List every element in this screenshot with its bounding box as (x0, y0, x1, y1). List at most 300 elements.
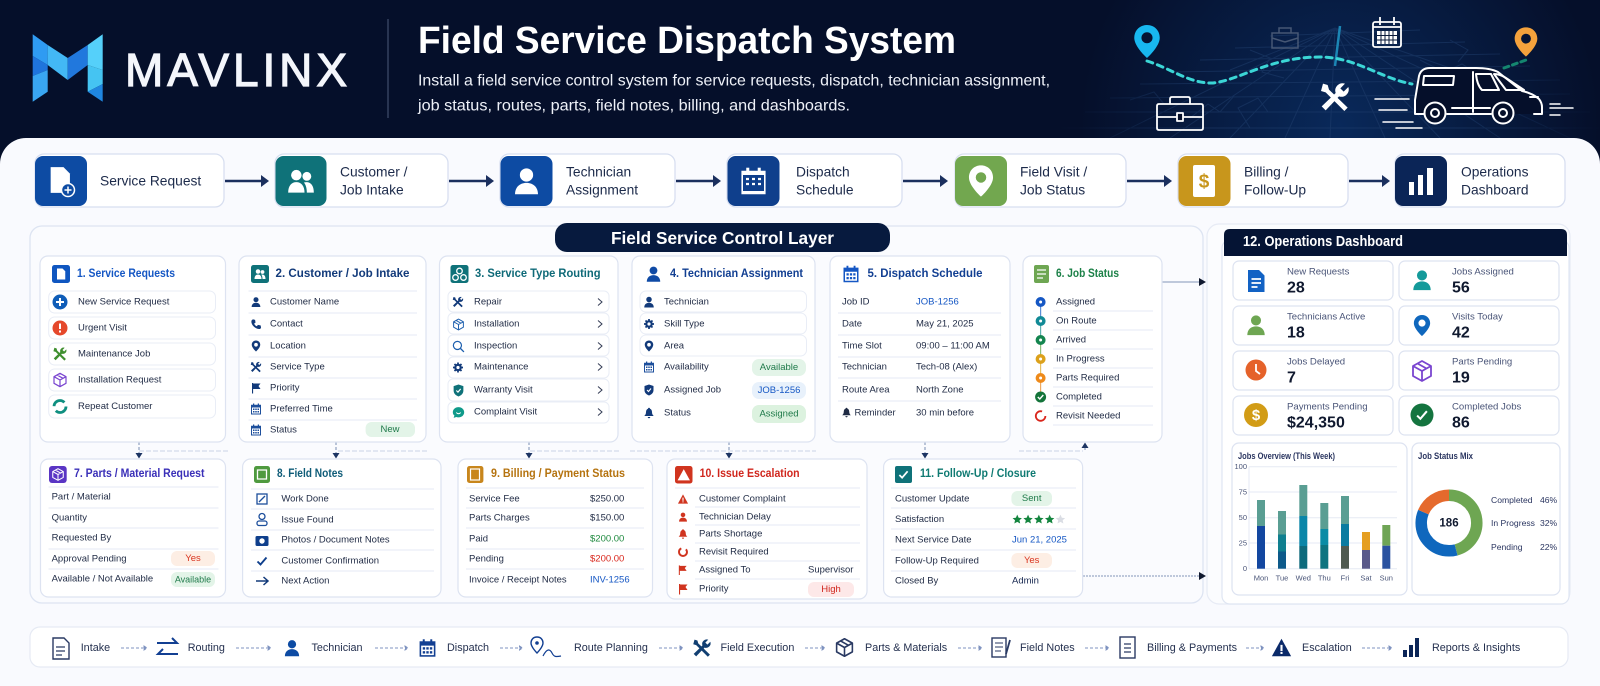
row: parts shortage: Parts Shortage (699, 528, 762, 540)
row: maintenance (448, 357, 609, 378)
status labels: In Progress (1056, 354, 1105, 364)
main white background panel (0, 138, 1600, 686)
row: photos / document notes: Photos / Document Notes (281, 534, 390, 546)
row: installation request (49, 369, 216, 391)
row: next action: Next Action (281, 576, 329, 586)
row: priority: Priority (270, 382, 300, 394)
icon: service van (1375, 68, 1573, 128)
row: time slot: 09:00 – 11:00 AM (916, 340, 990, 352)
x axis labels: Sat (1360, 574, 1373, 582)
item: reports and insights (1403, 638, 1521, 657)
row: available / not available: Available / Not Available (52, 574, 153, 584)
row: status: Assigned (759, 408, 799, 420)
step: Technician Assignment: Technician (566, 164, 631, 180)
icon (647, 267, 660, 282)
arrow (1349, 175, 1390, 187)
row: repair: Repair (474, 296, 502, 308)
tile: payments pending (1233, 396, 1393, 435)
tile: new requests: New Requests (1287, 266, 1350, 278)
row: invoice / receipt notes: Invoice / Receipt Notes (469, 574, 567, 586)
item: reports and insights: Reports & Insights (1432, 642, 1521, 654)
panel: 9. billing / payment status (458, 459, 652, 597)
legend: 22% (1540, 542, 1558, 552)
row: route area (842, 384, 964, 396)
legend (1491, 495, 1558, 552)
beam (1335, 26, 1340, 66)
row: maintenance job: Maintenance Job (78, 348, 150, 360)
row: route area: North Zone (916, 384, 964, 396)
row: date: May 21, 2025 (916, 318, 974, 330)
row: maintenance: Maintenance (474, 362, 528, 372)
row: technician (842, 362, 977, 372)
icon (49, 466, 67, 483)
row: service fee: $250.00 (590, 494, 624, 504)
icon (52, 265, 70, 283)
chart: jobs overview this week (1232, 443, 1407, 595)
y axis labels (1234, 462, 1247, 573)
item: field notes (992, 638, 1075, 657)
row: next service date: Next Service Date (895, 534, 972, 546)
row: date: Date (842, 318, 862, 330)
icon: calendar (1373, 17, 1401, 47)
step: Dispatch Schedule (727, 154, 902, 207)
row: inspection: Inspection (474, 340, 517, 352)
tile: payments pending: $ (1252, 407, 1261, 424)
panel: 3. service type routing (440, 256, 618, 442)
row: assigned job: Assigned Job (664, 384, 721, 396)
step: Operations Dashboard: Operations (1461, 164, 1529, 180)
subtitle: job status, routes, parts, field notes, billing, and dashboards. (417, 98, 850, 114)
tile: jobs delayed: 7 (1287, 370, 1296, 386)
heading: 5. Dispatch Schedule (868, 268, 982, 280)
arrow (1246, 646, 1264, 650)
item: billing and payments: Billing & Payments (1147, 642, 1238, 654)
row: area: Area (664, 340, 685, 352)
step: Service Request: Service Request (100, 174, 201, 188)
row: complaint visit (448, 402, 609, 423)
item: dispatch (420, 639, 489, 657)
legend: Completed (1491, 495, 1533, 505)
row: assigned to: Supervisor (808, 564, 853, 576)
arrow (449, 175, 494, 187)
process flow strip (35, 154, 1565, 207)
panel: 5. dispatch schedule (830, 256, 1010, 442)
item: intake: Intake (81, 642, 110, 654)
row: customer update: Customer Update (895, 494, 969, 504)
row: closed by: Admin (1012, 576, 1039, 586)
row: job id: Job ID (842, 296, 870, 308)
tile: technicians active: 18 (1287, 324, 1305, 342)
status labels: Arrived (1056, 334, 1086, 346)
icon (1034, 265, 1049, 283)
icon (844, 266, 858, 282)
item: dispatch: Dispatch (447, 642, 489, 654)
tile: technicians active (1233, 306, 1393, 345)
row: technician: Technician (664, 296, 709, 308)
arrow (1085, 646, 1109, 650)
icon: end pin (1515, 27, 1537, 57)
legend: 46% (1540, 495, 1558, 505)
heading pill: Field Service Control Layer (611, 228, 834, 248)
row: skill type: Skill Type (664, 318, 704, 330)
arrow (659, 646, 683, 650)
heading: 4. Technician Assignment (670, 268, 803, 280)
arrow (1362, 646, 1392, 650)
icon: start pin (1134, 25, 1160, 58)
step: Field Visit / Job Status: Field Visit / (1020, 164, 1087, 180)
row: assigned to: Assigned To (699, 564, 751, 576)
row: customer confirmation: Customer Confirmation (281, 556, 379, 566)
item: billing and payments (1120, 637, 1238, 658)
arrow: job status to dashboard (1162, 278, 1206, 286)
item: technician (285, 640, 363, 656)
tile: jobs assigned: 56 (1452, 280, 1470, 296)
tile: payments pending: $24,350 (1287, 414, 1345, 432)
row: pending: $200.00 (590, 554, 624, 564)
row: issue found: Issue Found (281, 514, 334, 526)
x axis labels: Tue (1276, 574, 1288, 582)
arrow (500, 646, 522, 650)
step: Customer / Job Intake: Job Intake (340, 182, 404, 198)
status labels: Assigned (1056, 296, 1095, 308)
row: satisfaction (895, 514, 1065, 525)
arrow (225, 175, 269, 187)
arrow (805, 646, 825, 650)
y axis labels: 0 (1243, 564, 1247, 573)
row: next action (256, 576, 329, 586)
x axis labels: Fri (1341, 574, 1350, 582)
panel: field service control layer (30, 223, 1203, 603)
logo mark (33, 34, 103, 102)
row: requested by: Requested By (52, 532, 112, 544)
row: follow-up required: Yes (1024, 555, 1040, 566)
row: pending (469, 554, 624, 564)
row: service type: Service Type (270, 362, 325, 372)
x axis labels: Sun (1380, 574, 1393, 582)
row: technician delay: Technician Delay (699, 512, 771, 522)
row: skill type (640, 313, 806, 334)
step: Technician Assignment: Assignment (566, 182, 638, 198)
row: satisfaction: Satisfaction (895, 514, 944, 525)
tile: jobs assigned (1399, 261, 1559, 300)
step: Operations Dashboard: Dashboard (1461, 182, 1528, 198)
arrow (375, 646, 408, 650)
row: closed by (895, 576, 1039, 586)
row: new service request (49, 291, 216, 313)
row: availability: Availability (664, 362, 709, 372)
y axis labels: 50 (1239, 513, 1247, 522)
heading: 7. Parts / Material Request (74, 468, 205, 480)
item: route planning: Route Planning (574, 642, 648, 654)
step: Customer / Job Intake (275, 154, 448, 207)
panel: 8. field notes (243, 459, 441, 597)
chart title: Job Status Mix (1418, 451, 1473, 461)
item: field execution: Field Execution (720, 642, 794, 654)
tile: payments pending: Payments Pending (1287, 402, 1368, 412)
logo wordmark: MAVLINX (125, 44, 347, 96)
chart title: Jobs Overview (This Week) (1238, 451, 1335, 461)
item: escalation (1272, 639, 1291, 656)
icon (251, 265, 269, 283)
step: Billing / Follow-Up: $ (1199, 172, 1210, 192)
icon: wrench and screwdriver (1321, 83, 1349, 111)
row: location: Location (270, 340, 306, 352)
arrow (903, 175, 948, 187)
item: routing: Routing (188, 642, 225, 654)
row: technician (640, 291, 806, 312)
heading: 6. Job Status (1056, 268, 1119, 280)
row: parts charges: Parts Charges (469, 512, 530, 524)
icon (675, 466, 692, 484)
row: quantity: Quantity (52, 512, 87, 524)
row: location (252, 340, 306, 352)
row: invoice / receipt notes (469, 574, 630, 586)
row: approval pending (52, 551, 215, 566)
row: assigned job: JOB-1256 (758, 385, 800, 396)
tile: completed jobs: Completed Jobs (1452, 402, 1522, 412)
row: priority (679, 582, 854, 597)
arrow (121, 646, 147, 650)
row: approval pending: Yes (185, 553, 201, 564)
subtitle: Install a field service control system for service requests, dispatch, technician assignment, (418, 72, 1050, 90)
icon (895, 466, 912, 483)
row: installation (448, 313, 609, 334)
row: invoice / receipt notes: INV-1256 (590, 574, 630, 586)
row: warranty visit (448, 379, 609, 401)
row: status: Status (664, 408, 691, 418)
step: Service Request (35, 154, 224, 207)
row: priority (252, 382, 300, 394)
row: availability (644, 359, 806, 376)
stacked bars (1257, 485, 1390, 569)
heading bar: 12. Operations Dashboard (1243, 234, 1403, 250)
item: technician: Technician (312, 642, 363, 654)
subtitle (417, 72, 1050, 114)
item: parts and materials: Parts & Materials (865, 642, 948, 654)
heading pill (555, 223, 890, 252)
tile: completed jobs: 86 (1452, 414, 1470, 432)
row: job id (842, 296, 959, 308)
row: available / not available (52, 572, 215, 587)
tile: jobs assigned: Jobs Assigned (1452, 266, 1514, 278)
row: service fee (469, 494, 624, 504)
row: reminder: Reminder (854, 408, 896, 418)
icon: faded briefcase (1272, 28, 1298, 48)
row: technician: Technician (842, 362, 887, 372)
row: urgent visit: Urgent Visit (78, 322, 127, 334)
row: repeat customer (49, 395, 216, 418)
row: paid (469, 534, 624, 544)
row: work done (257, 494, 329, 504)
row: available / not available: Available (175, 574, 211, 584)
row: service fee: Service Fee (469, 494, 520, 504)
route line (1147, 57, 1526, 84)
x axis labels (1254, 574, 1393, 582)
row: technician: Tech-08 (Alex) (916, 362, 977, 372)
panel: 6. job status (1023, 256, 1162, 442)
row: reminder: 30 min before (916, 408, 974, 418)
row: assigned job (644, 382, 806, 399)
row: status: Status (270, 424, 297, 436)
row: approval pending: Approval Pending (52, 554, 127, 564)
heading: 9. Billing / Payment Status (491, 468, 625, 480)
row: time slot (842, 340, 990, 352)
tile: visits today: 42 (1452, 324, 1470, 342)
status labels: On Route (1056, 316, 1097, 326)
panel: 10. issue escalation (667, 459, 867, 599)
donut (1421, 495, 1477, 551)
city map grid (1090, 28, 1570, 138)
heading: 11. Follow-Up / Closure (920, 468, 1036, 480)
row: repair (448, 291, 609, 312)
row: status: New (380, 424, 400, 435)
item: intake (53, 638, 110, 659)
heading: 2. Customer / Job Intake (276, 268, 410, 280)
row: contact: Contact (270, 318, 303, 330)
row: maintenance job (49, 343, 216, 365)
arrow (1127, 175, 1172, 187)
row: status (644, 405, 806, 423)
row: pending: Pending (469, 554, 504, 564)
row: parts charges (469, 512, 624, 524)
row: job id: JOB-1256 (916, 296, 959, 308)
step: Dispatch Schedule: Dispatch (796, 164, 850, 180)
step: Operations Dashboard (1395, 154, 1565, 207)
row: repeat customer: Repeat Customer (78, 401, 152, 412)
item: parts and materials (837, 639, 948, 656)
row: route area: Route Area (842, 384, 890, 396)
row: revisit required: Revisit Required (699, 546, 769, 558)
icon (450, 265, 468, 283)
row: customer complaint: Customer Complaint (699, 494, 786, 504)
icon (254, 466, 270, 483)
row: area (640, 335, 806, 356)
heading: 10. Issue Escalation (700, 468, 800, 480)
tile: completed jobs (1399, 396, 1559, 435)
row: availability: Available (760, 362, 798, 373)
row: installation: Installation (474, 318, 519, 330)
row: reminder (842, 408, 974, 418)
tile: parts pending: 19 (1452, 370, 1470, 386)
row: next service date (895, 534, 1067, 546)
row: next service date: Jun 21, 2025 (1012, 534, 1067, 546)
step: Billing / Follow-Up: Follow-Up (1244, 182, 1306, 198)
row: date (842, 318, 974, 330)
x axis labels: Thu (1318, 574, 1331, 582)
tile: visits today: Visits Today (1452, 312, 1503, 322)
panel: 2. customer / job intake (239, 256, 426, 442)
row: issue found (257, 514, 334, 526)
x axis labels: Mon (1254, 574, 1268, 582)
tile: new requests (1233, 261, 1393, 300)
panel: 11. follow-up / closure (884, 459, 1083, 597)
step: Dispatch Schedule: Schedule (796, 182, 854, 198)
icon: toolbox (1157, 97, 1203, 130)
status labels: Completed (1056, 392, 1102, 402)
row: work done: Work Done (281, 494, 329, 504)
row: warranty visit: Warranty Visit (474, 384, 533, 396)
panel: 7. parts / material request (40, 459, 226, 597)
row: preferred time: Preferred Time (270, 404, 333, 414)
header band (1086, 0, 1583, 138)
row: urgent visit (49, 317, 216, 339)
y axis labels: 25 (1239, 538, 1247, 548)
row: follow-up required (895, 553, 1052, 568)
row: contact (251, 318, 303, 330)
row: paid: Paid (469, 534, 488, 544)
header divider (387, 19, 389, 118)
chart: job status mix (1412, 443, 1560, 595)
row: customer update: Sent (1022, 493, 1042, 504)
y axis labels: 100 (1234, 462, 1247, 471)
tile: jobs delayed: Jobs Delayed (1287, 356, 1345, 368)
tile: parts pending (1399, 351, 1559, 390)
step: Billing / Follow-Up (1178, 154, 1348, 207)
heading: 3. Service Type Routing (475, 268, 600, 280)
tile: jobs delayed (1233, 351, 1393, 390)
item: field execution (693, 639, 794, 657)
item: routing (157, 638, 225, 654)
status labels (1056, 296, 1120, 422)
label: escalation: Escalation (1302, 642, 1352, 654)
item: field notes: Field Notes (1020, 642, 1075, 654)
title: Field Service Dispatch System (418, 20, 956, 62)
row: complaint visit: Complaint Visit (474, 406, 538, 418)
row: assigned to (679, 564, 853, 576)
row: priority: High (821, 584, 841, 595)
panel: 4. technician assignment (632, 256, 815, 442)
heading bar (1224, 229, 1567, 256)
row: follow-up required: Follow-Up Required (895, 556, 979, 566)
row: priority: Priority (699, 584, 729, 594)
row: inspection (448, 335, 609, 356)
panel: 12. operations dashboard (1207, 224, 1570, 604)
y axis labels: 75 (1239, 488, 1247, 496)
legend: Pending (1491, 542, 1523, 552)
legend: In Progress (1491, 518, 1535, 528)
step: Customer / Job Intake: Customer / (340, 164, 408, 180)
status timeline (1035, 297, 1046, 421)
donut total: 186 (1439, 518, 1459, 530)
row: status (251, 422, 415, 437)
x axis labels: Wed (1296, 574, 1311, 582)
arrow (676, 175, 721, 187)
arrow (958, 646, 982, 650)
arrow (236, 646, 271, 650)
panel: 1. service requests (40, 256, 226, 442)
tile: visits today (1399, 306, 1559, 345)
item: route planning (531, 637, 648, 657)
tile: new requests: 28 (1287, 280, 1305, 296)
row: closed by: Closed By (895, 576, 939, 586)
bottom workflow strip (30, 627, 1568, 667)
step: Field Visit / Job Status: Job Status (1020, 182, 1085, 198)
icon (467, 466, 483, 483)
row: time slot: Time Slot (842, 340, 882, 352)
status labels: Revisit Needed (1056, 410, 1120, 422)
row: customer update (895, 491, 1052, 506)
row: new service request: New Service Request (78, 296, 170, 308)
row: part / material: Part / Material (52, 492, 111, 502)
row: paid: $200.00 (590, 534, 624, 544)
heading: 8. Field Notes (277, 468, 343, 480)
heading: 1. Service Requests (77, 268, 175, 280)
row: customer name: Customer Name (270, 296, 339, 308)
step: Field Visit / Job Status (955, 154, 1126, 207)
connectors between rows (136, 442, 1088, 458)
legend: 32% (1540, 518, 1558, 528)
tile: technicians active: Technicians Active (1287, 312, 1365, 322)
